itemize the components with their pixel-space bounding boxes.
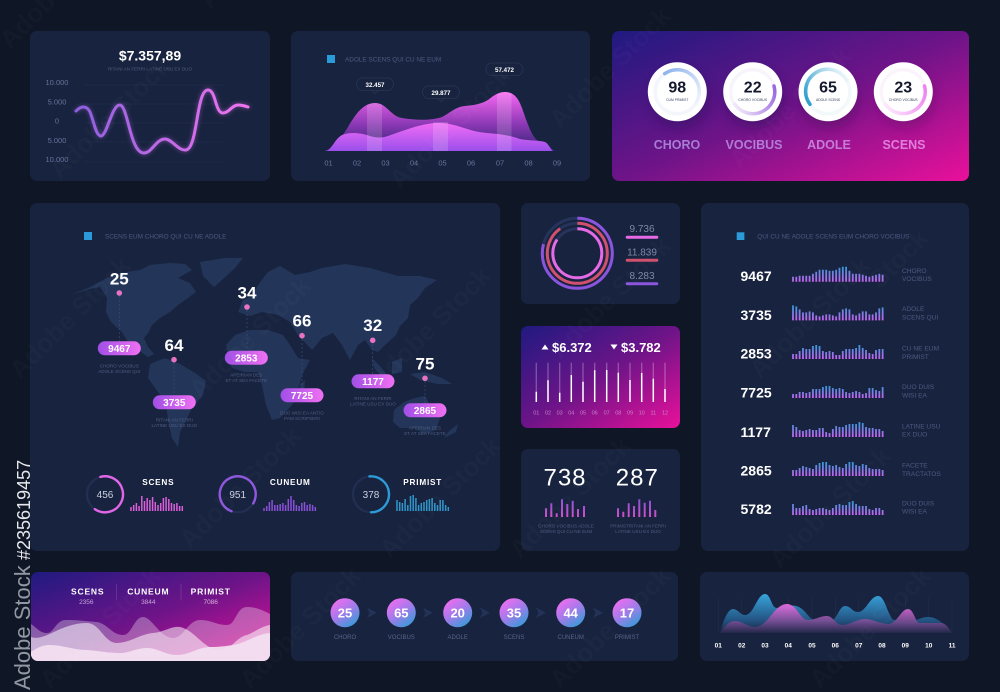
callout: 29.877 xyxy=(422,86,460,102)
x axis labels: 05 xyxy=(808,642,816,650)
stock credit: Adobe Stock xyxy=(10,564,35,690)
panel: ranked sparklines xyxy=(701,203,969,551)
step: scens: 35 xyxy=(507,605,521,620)
right caption: LATINE USU EX DUO xyxy=(615,529,661,534)
bar labels: 04 xyxy=(568,411,574,417)
row 7725 xyxy=(740,384,935,401)
x axis labels: 07 xyxy=(855,642,863,650)
right caption: PRIMISTRITANI AN FERRI xyxy=(610,524,666,528)
pin: 75: ET AT SEA FACETE xyxy=(404,431,446,436)
stock watermark: Adobe Stock xyxy=(543,230,677,364)
row 3735: ADOLE xyxy=(902,306,925,313)
step: adole: 20 xyxy=(450,605,465,620)
step: primist: PRIMIST xyxy=(615,635,639,641)
stat: cuneum 951: CUNEUM xyxy=(270,478,311,487)
row 9467: 9467 xyxy=(740,268,772,284)
row 3735: 3735 xyxy=(740,307,772,323)
stock watermark: Adobe Stock xyxy=(33,560,167,692)
gauge: choro 98: 98 xyxy=(668,80,686,96)
pin: 25: 9467 xyxy=(108,344,131,355)
pin: 66 xyxy=(280,311,324,421)
pin: 25: ADOLE SCENS QUI xyxy=(98,369,140,374)
bar labels: 06 xyxy=(592,411,598,417)
blue series xyxy=(720,594,952,633)
stat: primist 378 xyxy=(351,475,448,514)
y axis labels: 10.000 xyxy=(46,78,68,87)
stock watermark: Adobe Stock xyxy=(803,560,937,692)
row 2853: PRIMIST xyxy=(902,354,929,361)
front area series xyxy=(325,123,553,151)
pin: 34: APEIRIAN DES xyxy=(230,373,262,378)
x axis labels: 11 xyxy=(949,642,956,650)
stat: primist 378: PRIMIST xyxy=(403,478,442,487)
x axis labels: 08 xyxy=(878,642,886,650)
pin: 66: 7725 xyxy=(291,391,314,402)
gauge labels: VOCIBUS xyxy=(726,138,782,152)
pin: 75: APEIRIAN DES xyxy=(409,426,441,431)
pin: 32 xyxy=(350,316,396,407)
y axis labels: 10.000 xyxy=(46,155,68,164)
step: vocibus: VOCIBUS xyxy=(388,635,415,641)
x axis labels: 04 xyxy=(785,642,792,650)
bar labels: 12 xyxy=(662,411,668,417)
back area series xyxy=(325,92,556,151)
left caption: SCENS QUI CU NE EUM xyxy=(540,529,592,534)
up value: $6.372 xyxy=(552,340,592,355)
panel: two totals xyxy=(521,449,680,551)
row 7725: DUO DUIS xyxy=(902,384,935,391)
scens stat: 2356 xyxy=(79,599,94,606)
step: adole xyxy=(443,598,472,641)
gauge: scens 23: CHORO VOCIBUS xyxy=(889,98,918,102)
ring legend: 11.839 xyxy=(627,248,657,258)
row 9467: VOCIBUS xyxy=(902,276,932,283)
stat: cuneum 951: 951 xyxy=(229,490,246,501)
row 5782: 5782 xyxy=(740,501,772,517)
x axis labels: 08 xyxy=(524,158,533,168)
waves xyxy=(31,607,270,661)
pin: 64: 64 xyxy=(165,336,184,355)
bar values xyxy=(536,370,665,402)
cuneum stat xyxy=(127,586,169,606)
pin: 32: RITANI AN FERRI xyxy=(354,396,392,401)
row 1177: 1177 xyxy=(740,424,771,440)
legend marker xyxy=(737,232,744,240)
row 3735 xyxy=(740,305,938,323)
x axis labels xyxy=(324,158,561,168)
stat: scens 456: SCENS xyxy=(142,478,174,487)
pin: 34: ET AT SEA FACETE xyxy=(225,378,267,383)
x axis labels: 10 xyxy=(925,642,933,650)
legend marker xyxy=(327,55,335,63)
row 9467 xyxy=(740,267,932,284)
stock watermark: Adobe Stock xyxy=(723,40,857,174)
step: choro: 25 xyxy=(338,605,352,620)
total 738: 738 xyxy=(543,464,587,492)
callout: 57.472: 57.472 xyxy=(495,67,515,74)
gauge labels xyxy=(654,138,926,152)
ring legend: 9.736 xyxy=(629,224,655,235)
pin: 34 xyxy=(225,284,268,383)
stock watermark: Adobe Stock xyxy=(43,50,177,184)
pin: 32: 32 xyxy=(363,316,382,335)
pin: 66: 66 xyxy=(293,311,311,330)
pin: 64: RITANI AN FERRI xyxy=(156,418,193,422)
down value: $3.782 xyxy=(621,340,661,355)
row 7725: 7725 xyxy=(740,385,772,401)
primist stat: 7086 xyxy=(203,599,218,606)
row 1177: LATINE USU xyxy=(902,424,941,430)
stock credit xyxy=(10,460,35,690)
x axis labels: 06 xyxy=(467,158,475,168)
cuneum stat: 3844 xyxy=(141,599,156,606)
panel: balance line chart xyxy=(30,31,270,181)
bar labels: 01 xyxy=(533,411,539,417)
primist stat: PRIMIST xyxy=(191,586,231,596)
left caption xyxy=(538,524,594,534)
gauge: choro 98: CUM PRIMIST xyxy=(666,98,689,102)
panel: step sequence xyxy=(291,572,678,661)
step: choro xyxy=(330,598,360,641)
right bars xyxy=(618,499,655,517)
bar tracks xyxy=(536,363,665,402)
stock watermark: Stock xyxy=(863,223,935,294)
row 1177: EX DUO xyxy=(902,432,927,438)
step: scens xyxy=(500,598,528,641)
pin: 66: PAM SCRIPSERI xyxy=(284,416,320,421)
x axis labels: 01 xyxy=(324,158,333,168)
x axis labels: 02 xyxy=(353,158,361,168)
callout: 32.457 xyxy=(356,78,394,94)
stat: scens 456 xyxy=(83,472,182,516)
legend text: QUI CU NE ADOLE SCENS EUM CHORO VOCIBUS xyxy=(757,233,909,240)
pin: 75: 75 xyxy=(416,355,434,374)
x axis labels: 06 xyxy=(832,642,839,650)
y axis labels: 5.000 xyxy=(48,98,66,106)
bar labels: 09 xyxy=(627,411,633,417)
pin: 64: LATINE USU EX DUO xyxy=(151,423,198,428)
left caption: CHORO VOCIBUS ADOLE xyxy=(538,524,594,528)
bar labels: 07 xyxy=(604,411,610,417)
gauge: vocibus 22: CHORO VOCIBUS xyxy=(738,98,768,102)
bar labels xyxy=(533,411,668,417)
legend marker xyxy=(84,232,92,240)
x axis labels: 09 xyxy=(553,158,561,168)
ring legend: 8.283 xyxy=(629,271,655,282)
stock watermark: Adobe Stock xyxy=(183,270,317,404)
pin: 34: 2853 xyxy=(235,353,258,364)
step: vocibus: 65 xyxy=(394,605,409,620)
step: primist: 17 xyxy=(620,605,634,620)
pin: 66: DUO WISI EA ANTIO xyxy=(280,410,324,415)
callout: 29.877: 29.877 xyxy=(432,90,451,97)
x axis labels: 09 xyxy=(902,642,909,650)
right caption xyxy=(610,524,666,534)
gauge labels: SCENS xyxy=(882,138,926,152)
scens stat: SCENS xyxy=(71,586,104,596)
panel: up and down bars xyxy=(521,326,680,428)
y axis labels: 5.000 xyxy=(48,136,66,145)
stock watermark: Adobe Stock xyxy=(363,260,497,394)
gauge: vocibus 22 xyxy=(723,62,783,128)
balance value: $7.357,89 xyxy=(119,48,181,64)
row 2853: CU NE EUM xyxy=(902,346,939,352)
x axis labels: 01 xyxy=(715,642,722,650)
left bars xyxy=(546,499,584,517)
gauge: scens 23: 23 xyxy=(894,80,912,96)
gauge labels: ADOLE xyxy=(807,138,851,152)
pin: 64 xyxy=(151,336,198,428)
x axis labels xyxy=(715,642,956,650)
step arrows xyxy=(367,608,603,618)
ring legend xyxy=(626,224,658,285)
pin: 25: CHORO VOCIBUS xyxy=(100,364,139,368)
row 2853: 2853 xyxy=(740,346,772,362)
legend text: SCENS EUM CHORO QUI CU NE ADOLE xyxy=(105,233,226,240)
stock watermark: Adobe Stock xyxy=(763,440,897,574)
bar labels: 10 xyxy=(639,411,645,417)
x axis labels: 05 xyxy=(438,158,447,168)
gauge: scens 23 xyxy=(874,62,934,128)
world map xyxy=(70,258,458,447)
total 287: 287 xyxy=(616,464,659,492)
balance caption: RITANI AN FERRI LATINE USU EX DUO xyxy=(108,66,192,72)
gauge: adole 65: 65 xyxy=(819,80,837,96)
panel: gauges xyxy=(612,31,969,181)
row 5782: DUO DUIS xyxy=(902,500,935,508)
pink series xyxy=(720,604,952,633)
cuneum stat: CUNEUM xyxy=(127,586,169,596)
callout: 57.472 xyxy=(486,63,523,79)
row 2865: TRACTATOS xyxy=(902,471,941,478)
panel: layered wave chart xyxy=(700,572,969,661)
pin: 75 xyxy=(404,355,446,436)
row 5782: WISI EA xyxy=(902,509,928,516)
stock watermark: Adobe Stock xyxy=(743,250,877,384)
gauge: adole 65: ADOLE SCENS xyxy=(816,98,841,102)
step: cuneum: 44 xyxy=(563,605,579,620)
panel: world map xyxy=(30,203,500,551)
y axis labels: 0 xyxy=(55,116,59,126)
gauge: choro 98 xyxy=(648,62,708,128)
bar labels: 11 xyxy=(650,411,656,417)
line series xyxy=(76,90,248,153)
pin: 75: 2865 xyxy=(414,406,437,417)
step: vocibus xyxy=(387,598,416,641)
row 2865: 2865 xyxy=(740,463,772,479)
gauge: vocibus 22: 22 xyxy=(744,80,762,96)
bar labels: 03 xyxy=(557,411,563,417)
pin: 32: 1177 xyxy=(362,377,384,388)
stock watermark: Adobe Stock xyxy=(233,560,367,692)
pin: 32: LATINE USU EX DUO xyxy=(350,402,396,407)
x axis labels: 07 xyxy=(496,158,504,168)
pin: 64: 3735 xyxy=(163,398,186,409)
row 3735: SCENS QUI xyxy=(902,314,938,322)
step: choro: CHORO xyxy=(334,635,356,641)
step: cuneum xyxy=(556,598,585,641)
x axis labels: 03 xyxy=(381,158,390,168)
row 7725: WISI EA xyxy=(902,392,928,400)
panel: wave summary xyxy=(31,572,270,661)
step: adole: ADOLE xyxy=(448,635,468,641)
row 1177 xyxy=(740,422,941,440)
step: primist xyxy=(612,598,642,641)
row 2865 xyxy=(740,462,941,479)
stock watermark: Adobe Stock xyxy=(543,0,677,134)
stat: scens 456: 456 xyxy=(97,490,114,501)
pin: 34: 34 xyxy=(238,284,257,303)
bar labels: 05 xyxy=(580,411,586,417)
gauge: adole 65 xyxy=(798,62,858,128)
panel: concentric ring chart xyxy=(521,203,680,304)
stat: cuneum 951 xyxy=(215,471,315,517)
y axis labels xyxy=(46,78,68,164)
bar labels: 08 xyxy=(615,411,621,417)
stock watermark: Adobe Stock xyxy=(173,420,307,554)
bar labels: 02 xyxy=(545,411,551,417)
stock credit: #235619457 xyxy=(14,460,34,560)
pin: 25 xyxy=(98,270,141,374)
row 2853 xyxy=(740,345,939,362)
stock watermark: Adobe Stock xyxy=(383,60,517,194)
callout: 32.457: 32.457 xyxy=(366,82,385,89)
highlight columns xyxy=(367,90,512,151)
step: scens: SCENS xyxy=(504,635,524,641)
gauge labels: CHORO xyxy=(654,138,701,152)
stock watermark: Adobe Stock xyxy=(503,430,637,564)
legend text: ADOLE SCENS QUI CU NE EUM xyxy=(345,56,441,64)
row 2865: FACETE xyxy=(902,463,928,470)
stock watermark: Adobe Stock xyxy=(3,250,137,384)
row 5782 xyxy=(740,500,935,517)
stock watermark: Adobe Stock xyxy=(543,560,677,692)
scens stat xyxy=(71,586,104,606)
primist stat xyxy=(191,586,231,606)
x axis labels: 04 xyxy=(410,158,418,168)
step: cuneum: CUNEUM xyxy=(558,635,584,641)
row 9467: CHORO xyxy=(902,268,927,275)
stock watermark: Adobe Stock xyxy=(373,430,507,564)
x axis labels: 02 xyxy=(738,642,746,650)
pin: 25: 25 xyxy=(110,270,129,289)
stat: primist 378: 378 xyxy=(363,490,380,501)
panel: area chart xyxy=(291,31,590,181)
rings xyxy=(542,218,612,288)
x axis labels: 03 xyxy=(761,642,769,650)
